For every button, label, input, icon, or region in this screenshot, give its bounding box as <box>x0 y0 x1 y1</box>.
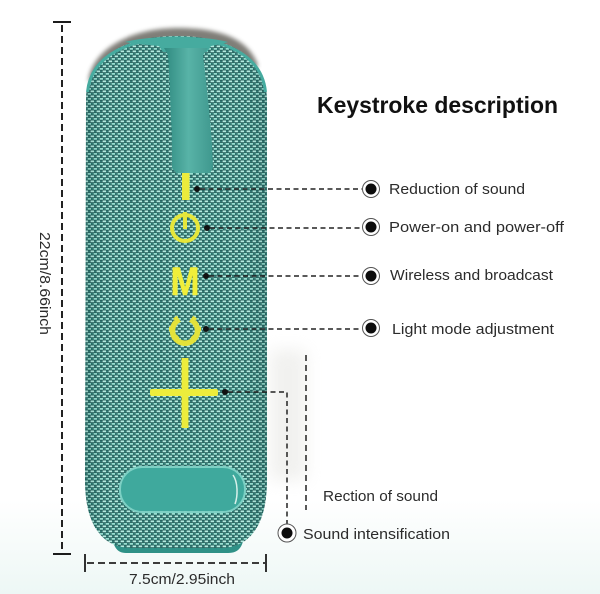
button: mode: M <box>170 260 200 304</box>
speaker <box>85 28 267 553</box>
speaker body <box>85 36 267 548</box>
speaker base <box>112 535 244 553</box>
top rim <box>88 38 266 92</box>
dimension: width <box>85 554 266 588</box>
callout: wireless: Wireless and broadcast <box>390 267 554 284</box>
dimension: height <box>36 22 71 554</box>
height label: 22cm/8.66inch <box>36 232 52 335</box>
button: volume down <box>182 173 190 200</box>
button: volume up <box>150 358 218 428</box>
body shading <box>85 36 267 548</box>
callout: reduction of sound: Reduction of sound <box>389 181 525 198</box>
callout: sound intensification <box>222 389 450 543</box>
callout: light mode: Light mode adjustment <box>392 321 555 338</box>
button: power <box>172 212 198 241</box>
callout: sound intensification: Sound intensification <box>303 526 450 543</box>
callout: power <box>204 218 565 236</box>
heading: Keystroke description <box>317 92 558 118</box>
callout: reduction of sound <box>194 180 525 198</box>
callout: power: Power-on and power-off <box>389 219 565 236</box>
button: light mode <box>169 317 201 346</box>
speaker shadow <box>88 28 258 82</box>
width label: 7.5cm/2.95inch <box>129 572 235 588</box>
callout: light mode <box>203 320 555 338</box>
strap <box>164 48 213 173</box>
callout: rection of sound: Rection of sound <box>323 488 438 505</box>
callout: wireless <box>203 267 554 284</box>
passive slot <box>120 467 245 512</box>
rim tab <box>125 37 228 52</box>
